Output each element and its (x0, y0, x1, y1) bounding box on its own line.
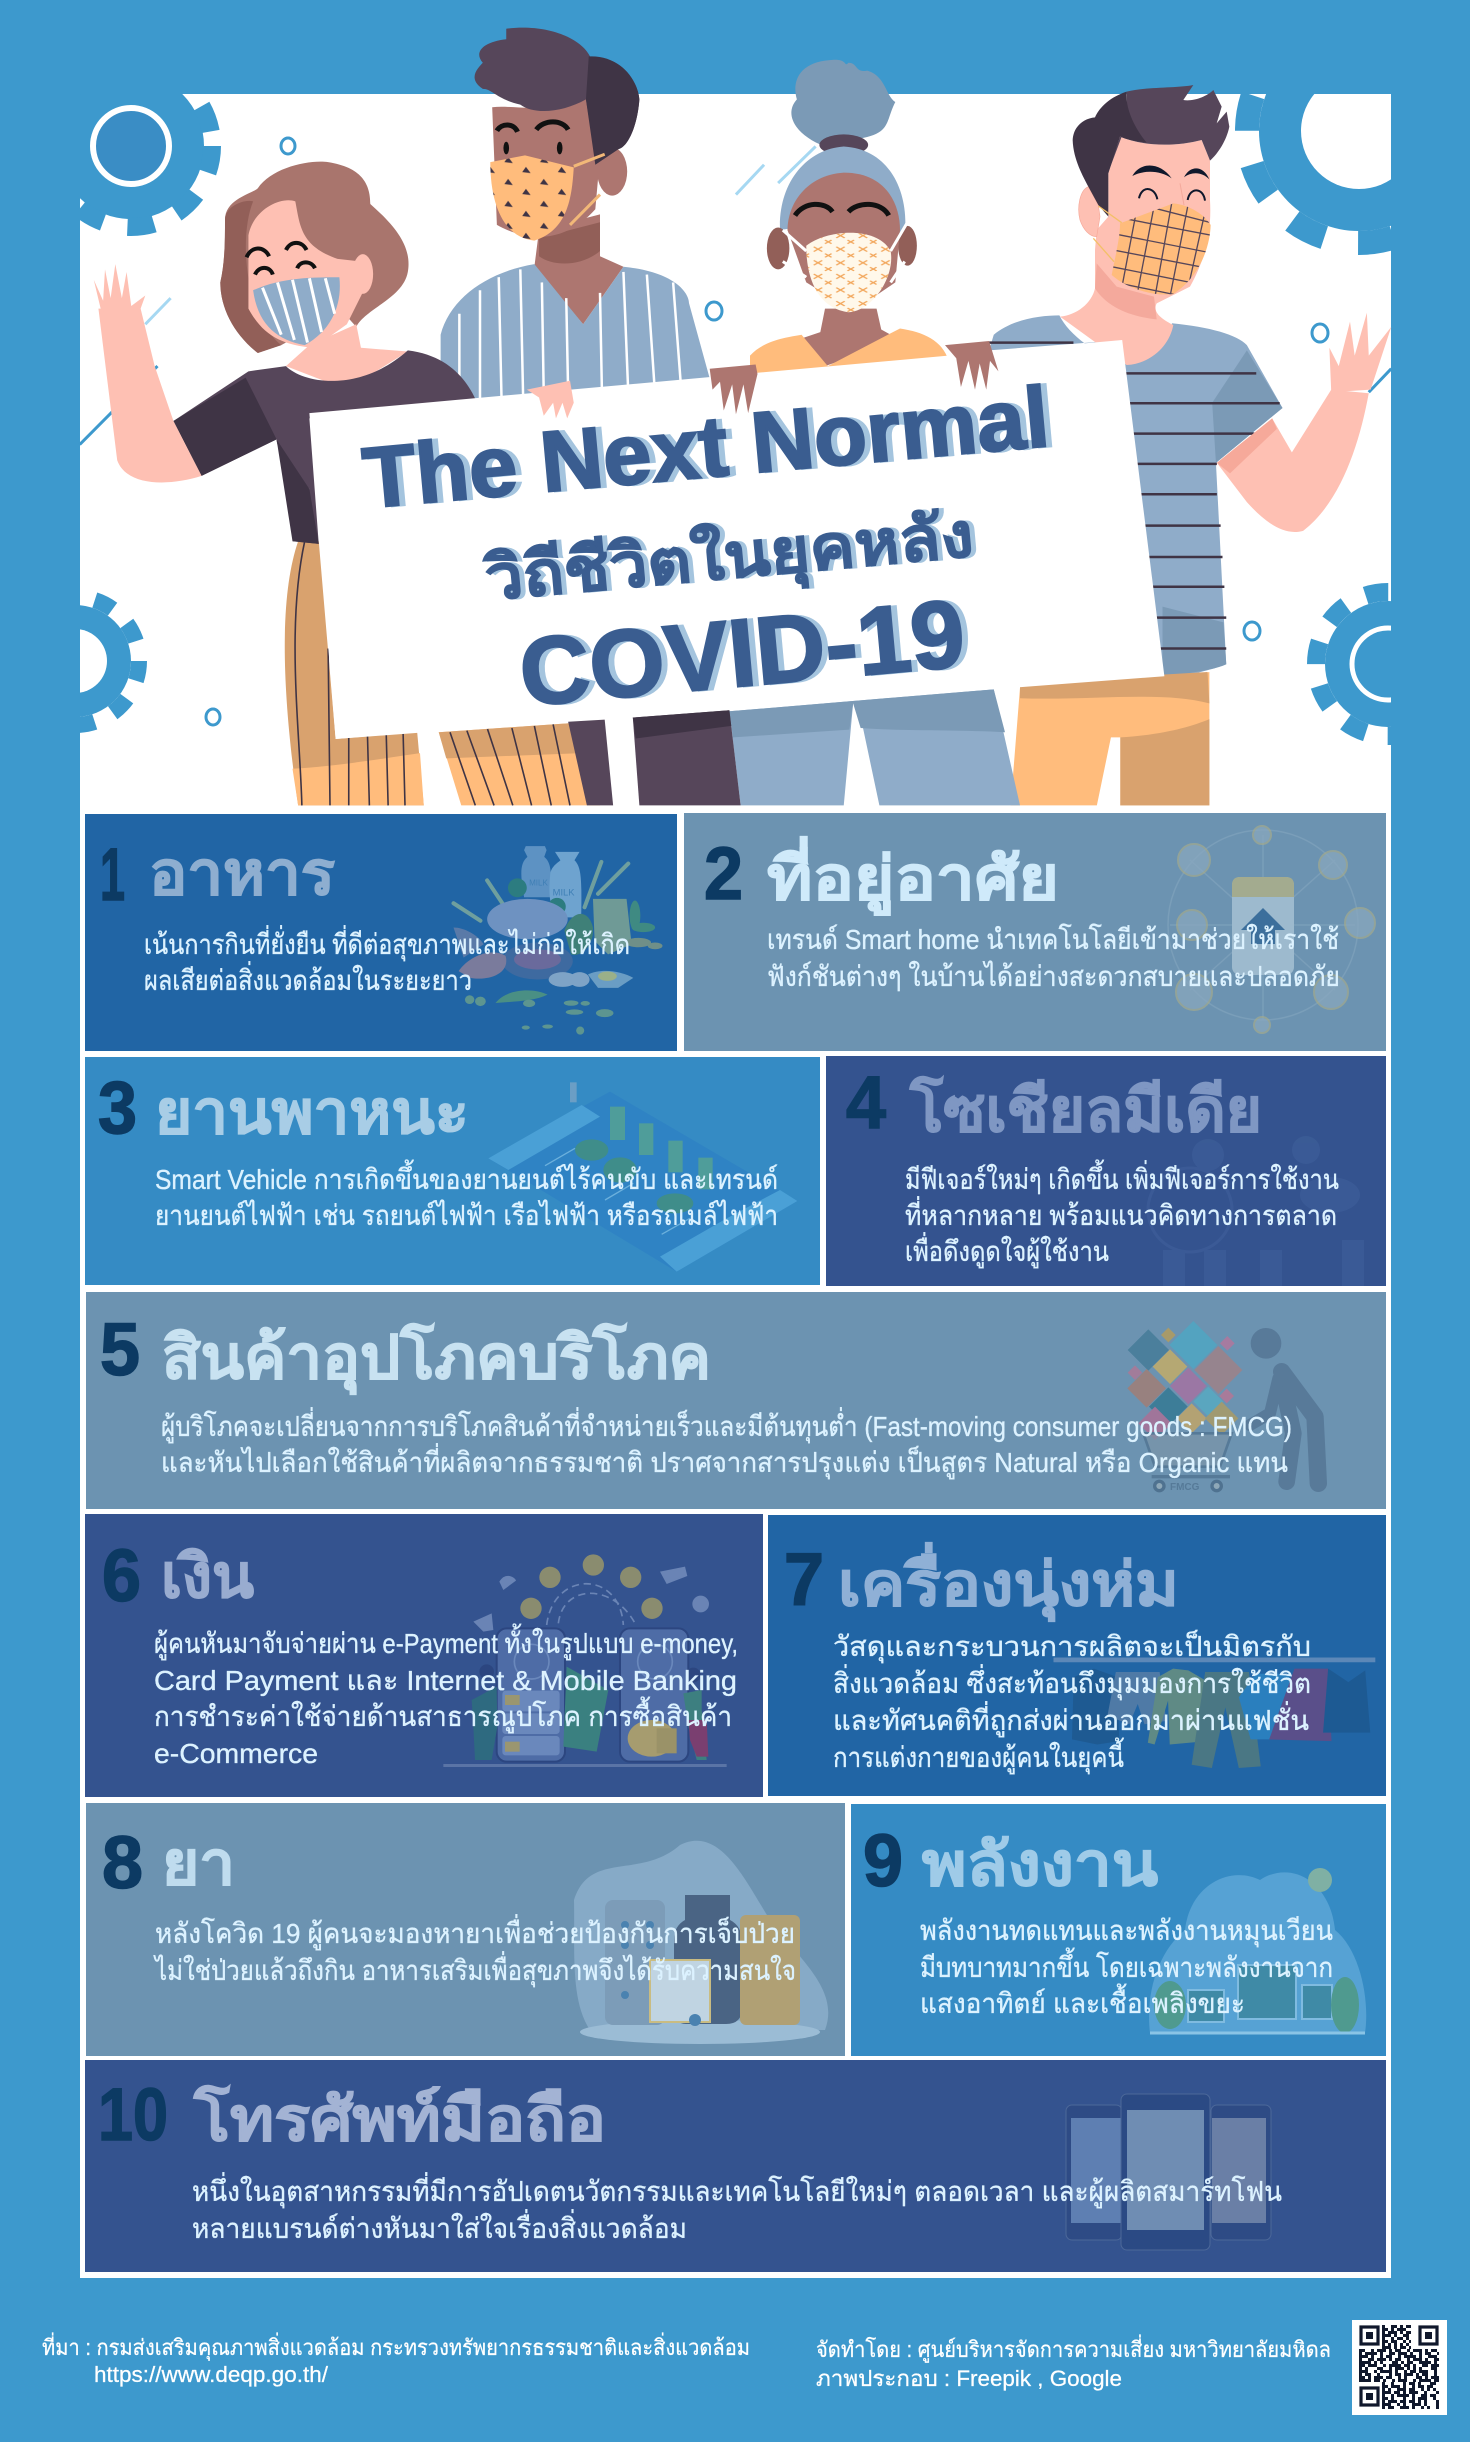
subtitle: Thai: วิถีชีวิตในยุคหลัง (481, 499, 977, 617)
body text (154, 1623, 738, 1769)
body text: พลังงานทดแทนและพลังงานหมุนเวียน (920, 1915, 1333, 1948)
illustration: food: MILK (529, 878, 549, 887)
body text (153, 1914, 796, 1988)
QR code (1352, 2320, 1447, 2415)
body text: ไม่ใช่ป่วยแล้วถึงกิน อาหารเสริมเพื่อสุขภาพจึงได้รับความสนใจ (153, 1951, 796, 1988)
number: 4 (846, 1061, 886, 1144)
body text: วัสดุและกระบวนการผลิตจะเป็นมิตรกับ (833, 1629, 1311, 1664)
panel 8: medicine (86, 1803, 845, 2056)
heading: ยานพาหนะ (155, 1079, 469, 1146)
heading: เงิน (161, 1543, 254, 1610)
title: The Next Normal: The Next Normal (359, 369, 1053, 527)
panel 10: mobile phones (85, 2060, 1386, 2272)
body text: ผู้คนหันมาจับจ่ายผ่าน e-Payment ทั้งในรูปแบบ e-money, (154, 1623, 738, 1661)
illustration: e-payment phones (443, 1554, 727, 1767)
illustration: social network (1148, 1136, 1364, 1286)
legs (285, 541, 1209, 805)
body text (833, 1629, 1311, 1775)
number: 6 (102, 1534, 141, 1617)
body text: เน้นการกินที่ยั่งยืน ที่ดีต่อสุขภาพและไม่ก่อให้เกิด (144, 925, 630, 962)
illustration: food: MILK (553, 887, 575, 898)
illustration: shopping cart and person: FMCG (1170, 1482, 1200, 1493)
hero illustration (80, 28, 1392, 806)
decorative lines (80, 146, 1391, 445)
body text (155, 1159, 778, 1231)
number: 9 (863, 1819, 903, 1902)
body text (767, 923, 1340, 992)
illustration: food (454, 846, 663, 1035)
illustration: smart road (488, 1082, 797, 1272)
number: 5 (100, 1308, 140, 1391)
body text: ที่หลากหลาย พร้อมแนวคิดทางการตลาด (905, 1196, 1337, 1231)
body text: มีฟีเจอร์ใหม่ๆ เกิดขึ้น เพิ่มฟีเจอร์การใช้งาน (905, 1159, 1339, 1195)
panel 7: clothing (768, 1515, 1386, 1796)
body text: Smart Vehicle การเกิดขึ้นของยานยนต์ไร้คนขับ และเทรนด์ (155, 1159, 778, 1195)
person: man right body (989, 313, 1391, 690)
icon: gears (80, 94, 1391, 745)
heading: ยา (162, 1830, 235, 1897)
body text: แสงอาทิตย์ และเชื้อเพลิงขยะ (920, 1983, 1245, 2019)
number: 7 (784, 1538, 824, 1621)
person: woman left (94, 162, 478, 544)
footer: source: ที่มา : กรมส่งเสริมคุณภาพสิ่งแวดล้อม กระทรวงทรัพยากรธรรมชาติและสิ่งแวดล้อม (42, 2332, 750, 2361)
body text (144, 925, 630, 996)
body text: ผลเสียต่อสิ่งแวดล้อมในระยะยาว (144, 961, 472, 996)
body text: สิ่งแวดล้อม ซึ่งสะท้อนถึงมุมมองการใช้ชีวิต (833, 1664, 1311, 1701)
body text: การแต่งกายของผู้คนในยุคนี้ (833, 1737, 1124, 1775)
heading: เครื่องนุ่งห่ม (838, 1542, 1179, 1622)
body text: เพื่อดึงดูดใจผู้ใช้งาน (905, 1232, 1109, 1269)
heading: อาหาร (149, 840, 335, 907)
number: 2 (704, 832, 743, 915)
person: man right head (1060, 85, 1229, 365)
heading: พลังงาน (922, 1831, 1158, 1898)
footer: credits: จัดทำโดย : ศูนย์บริหารจัดการความเสี่ยง มหาวิทยาลัยมหิดล (816, 2334, 1331, 2363)
sign board (309, 340, 1164, 739)
person: man back centre (441, 28, 711, 408)
body text: การชำระค่าใช้จ่ายด้านสาธารณูปโภค การซื้อสินค้า (154, 1696, 732, 1734)
title on sign (359, 369, 1059, 727)
body text: และทัศนคติที่ถูกส่งผ่านออกมาผ่านแฟชั่น (833, 1701, 1309, 1738)
footer: source (42, 2332, 750, 2387)
title: COVID-19: COVID-19 (515, 580, 969, 727)
body text: และหันไปเลือกใช้สินค้าที่ผลิตจากธรรมชาติ ปราศจากสารปรุงแต่ง เป็นสูตร Natural หรือ Organic แทน (161, 1443, 1288, 1480)
illustration: medicine bottles (574, 1841, 828, 2044)
hands holding the sign (527, 341, 998, 418)
body text: ผู้บริโภคจะเปลี่ยนจากการบริโภคสินค้าที่จำหน่ายเร็วและมีต้นทุนต่ำ (Fast-moving consumer goods : FMCG) (161, 1407, 1292, 1444)
body text: มีบทบาทมากขึ้น โดยเฉพาะพลังงานจาก (920, 1947, 1333, 1983)
title: The Next Normal: The Next Normal (365, 369, 1059, 527)
decorative rings (206, 138, 1328, 725)
body text: หลายแบรนด์ต่างหันมาใส่ใจเรื่องสิ่งแวดล้อม (192, 2209, 687, 2244)
panel 3: vehicles (85, 1057, 820, 1285)
illustration: shopping cart and person (1127, 1321, 1318, 1493)
number: 10 (98, 2073, 168, 2156)
footer: source: https://www.deqp.go.th/ (94, 2362, 329, 2387)
panel 5: consumer goods (86, 1292, 1386, 1509)
footer: credits: ภาพประกอบ : Freepik , Google (816, 2366, 1122, 2391)
body text (192, 2172, 1282, 2244)
body text: ยานยนต์ไฟฟ้า เช่น รถยนต์ไฟฟ้า เรือไฟฟ้า หรือรถเมล์ไฟฟ้า (155, 1200, 778, 1231)
heading: ที่อยู่อาศัย (767, 836, 1059, 916)
panel 4: social media (826, 1056, 1386, 1286)
number: 8 (102, 1821, 143, 1904)
body text: Card Payment และ Internet & Mobile Banking (154, 1665, 737, 1696)
number: 1 (100, 833, 125, 916)
body text (905, 1159, 1339, 1269)
body text: ฟังก์ชันต่างๆ ในบ้านได้อย่างสะดวกสบายและปลอดภัย (767, 960, 1340, 992)
heading: โทรศัพท์มือถือ (193, 2084, 606, 2153)
illustration: smartphones (1066, 2094, 1271, 2250)
panel 6: money (85, 1514, 763, 1797)
title: COVID-19: COVID-19 (521, 580, 975, 727)
white frame panel (80, 94, 1391, 2278)
heading: สินค้าอุปโภคบริโภค (162, 1322, 711, 1395)
illustration: smart home (1168, 826, 1375, 1033)
body text (161, 1407, 1292, 1480)
person: woman back right (750, 60, 949, 374)
body text: e-Commerce (154, 1738, 318, 1769)
number: 3 (98, 1066, 137, 1149)
illustration: renewable energy (1149, 1868, 1366, 2033)
subtitle: Thai: วิถีชีวิตในยุคหลัง (486, 499, 982, 617)
panel 9: energy (851, 1804, 1386, 2056)
footer: credits (816, 2334, 1331, 2391)
body text: หลังโควิด 19 ผู้คนจะมองหายาเพื่อช่วยป้องกันการเจ็บป่วย (155, 1914, 795, 1951)
heading: โซเชียลมีเดีย (909, 1075, 1262, 1144)
body text: หนึ่งในอุตสาหกรรมที่มีการอัปเดตนวัตกรรมและเทคโนโลยีใหม่ๆ ตลอดเวลา และผู้ผลิตสมาร์ทโฟน (192, 2172, 1282, 2209)
panel 1: food (85, 814, 677, 1051)
illustration: clothes rail (1053, 1658, 1375, 1768)
body text (920, 1915, 1333, 2019)
body text: เทรนด์ Smart home นำเทคโนโลยีเข้ามาช่วยให้เราใช้ (767, 923, 1339, 955)
panel 2: housing (684, 813, 1386, 1051)
